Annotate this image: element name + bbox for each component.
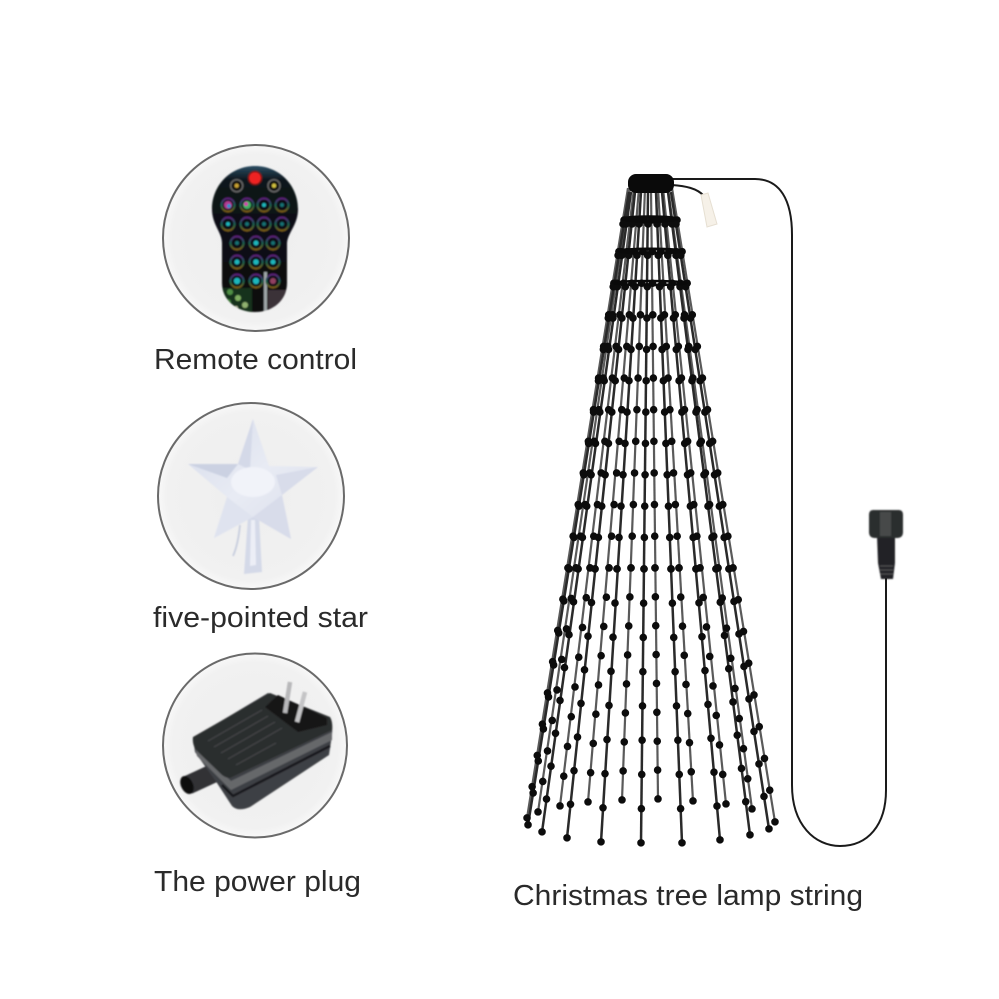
circle: star background [158,403,344,589]
tree strands [527,188,775,843]
panel: power plug [154,654,361,898]
circle: remote background [163,145,349,331]
tree beads: lower section [527,568,775,843]
wire and white connector [672,185,717,227]
label: lamp string: Christmas tree lamp string [513,880,863,912]
tree beads: upper section [568,220,733,569]
label: remote control: Remote control [154,344,357,376]
panel: christmas tree lamp string [513,174,903,912]
panel: five-pointed star [153,403,369,634]
wire: power cable [672,179,886,846]
upper rings [613,217,687,285]
top cap [628,174,674,193]
circle: plug background [163,654,347,838]
icon: star [188,419,318,574]
label: five-pointed star: five-pointed star [153,602,369,634]
connector: waterproof plug [869,510,903,579]
icon: remote control [212,166,298,314]
label: power plug: The power plug [154,866,361,898]
panel: remote control [154,145,357,376]
icon: power plug [178,682,332,809]
